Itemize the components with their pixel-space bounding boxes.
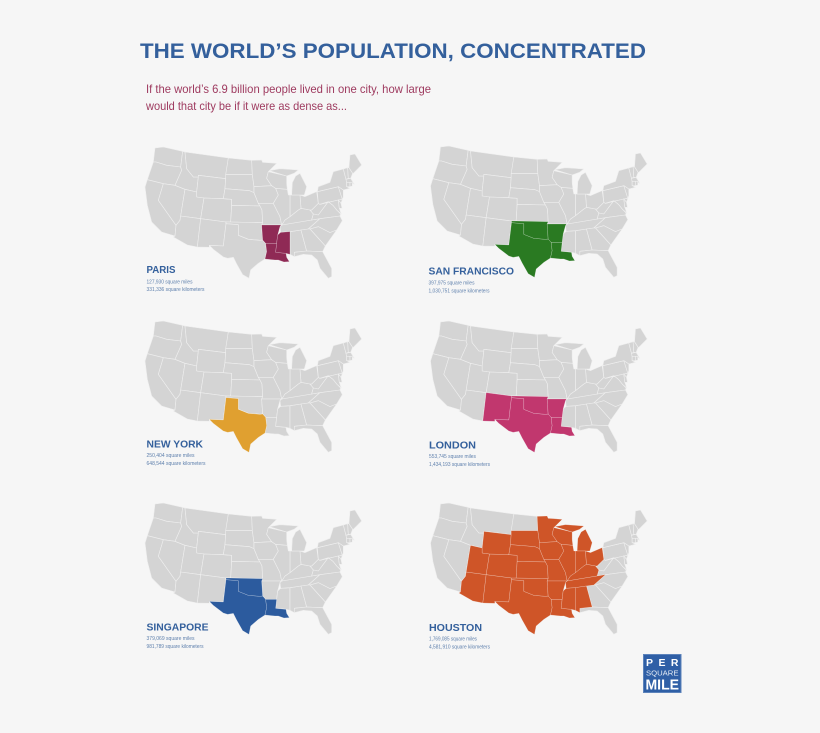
label: Paris: 127,930 square miles [146, 280, 193, 286]
map: Houston area on US map [430, 503, 647, 634]
logo: Per Square Mile [644, 654, 681, 694]
title: THE WORLD’S POPULATION, CONCENTRATED [140, 39, 646, 63]
label: London: LONDON [429, 440, 476, 452]
label: Singapore [146, 622, 208, 650]
label: Paris: 331,336 square kilometers [146, 287, 205, 293]
label: San Francisco: 1,030,751 square kilometers [428, 288, 490, 294]
map: Paris area on US map [145, 147, 362, 278]
subtitle: would that city be if it were as dense as... [145, 99, 347, 113]
label: Houston: 1,769,085 square miles [429, 636, 477, 642]
map: San Francisco area on US map [430, 146, 647, 277]
label: London [429, 440, 490, 468]
label: New York [146, 438, 206, 467]
panel: New York [145, 321, 362, 467]
panel: London [429, 321, 647, 468]
panel: Singapore [145, 503, 362, 650]
map: Singapore area on US map [145, 503, 362, 634]
label: New York: 648,544 square kilometers [146, 461, 206, 467]
label: New York: 250,404 square miles [146, 453, 195, 459]
map: New York area on US map [145, 321, 362, 452]
label: Singapore: SINGAPORE [146, 622, 208, 634]
label: Paris: PARIS [146, 264, 176, 276]
label: Houston [429, 622, 490, 650]
label: Houston: 4,581,910 square kilometers [429, 644, 490, 650]
panel: Paris [145, 147, 362, 293]
panel: Houston [429, 503, 647, 650]
logo: Per Square Mile: SQUARE [646, 668, 678, 678]
label: Paris [146, 264, 205, 293]
label: Houston: HOUSTON [429, 622, 482, 634]
panel: San Francisco [428, 146, 647, 294]
logo: Per Square Mile: MILE [646, 676, 679, 694]
subtitle: If the world’s 6.9 billion people lived in one city, how large [146, 82, 431, 96]
label: Singapore: 379,069 square miles [146, 636, 195, 642]
logo: Per Square Mile: PER [646, 657, 679, 669]
label: New York: NEW YORK [146, 438, 203, 450]
map: London area on US map [430, 321, 647, 452]
label: San Francisco: SAN FRANCISCO [428, 266, 514, 278]
label: London: 553,745 square miles [429, 454, 476, 460]
subtitle [145, 82, 431, 113]
label: Singapore: 981,789 square kilometers [146, 644, 204, 650]
label: San Francisco: 397,975 square miles [428, 280, 475, 286]
label: London: 1,434,193 square kilometers [429, 462, 490, 468]
label: San Francisco [428, 266, 514, 294]
